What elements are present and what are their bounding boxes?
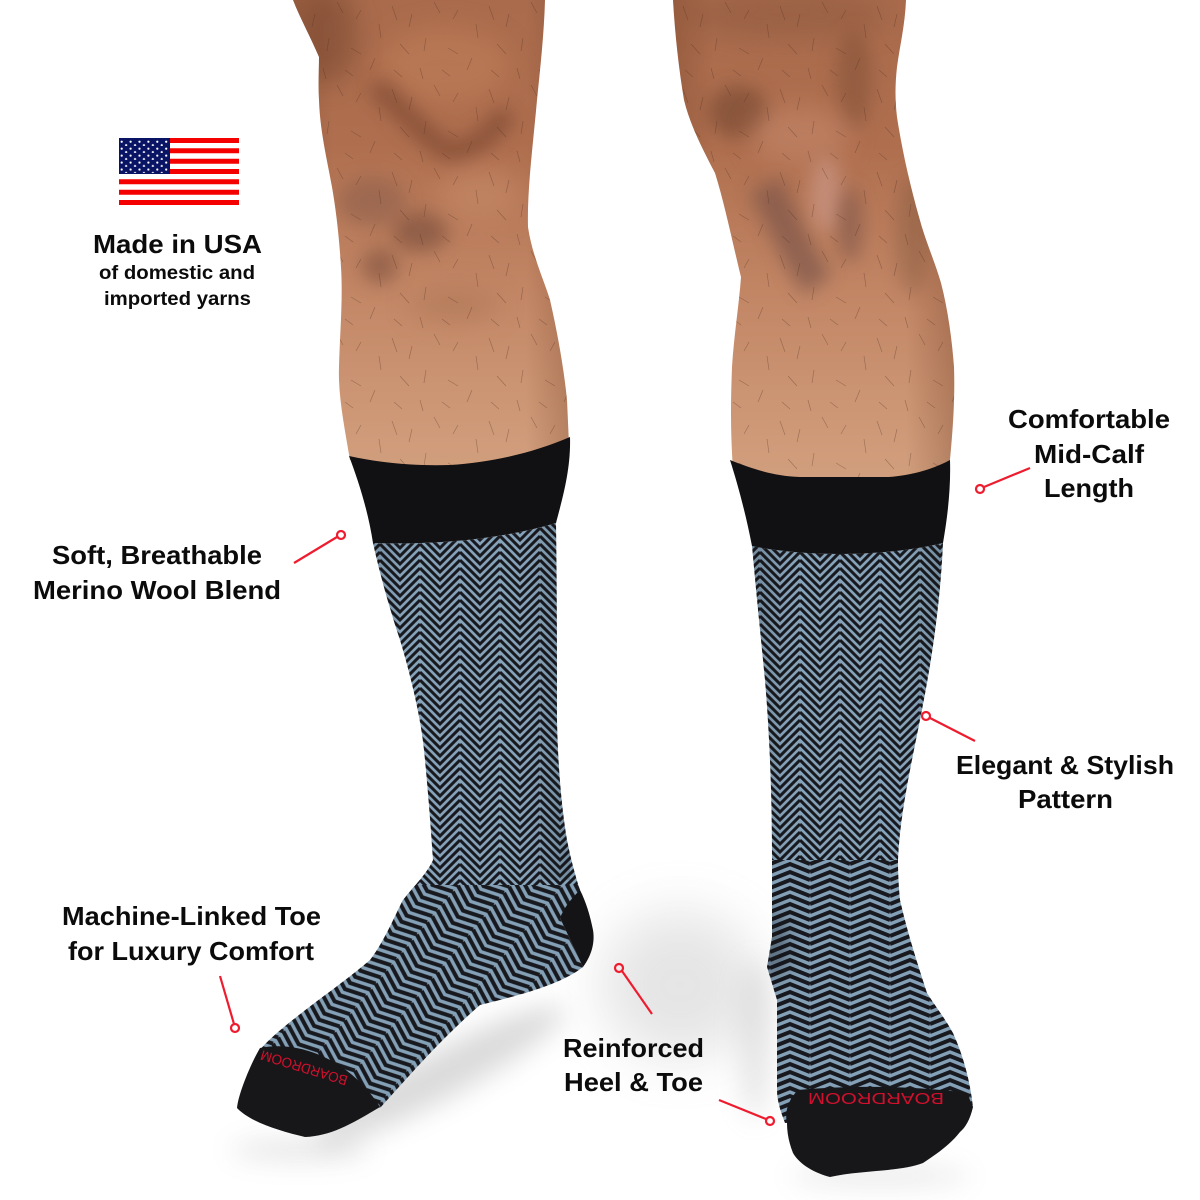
right sock cuff (730, 460, 950, 554)
callout: made in usa: Made in USA (93, 229, 262, 259)
callout: elegant pattern: Elegant & Stylish (956, 750, 1174, 780)
callout: merino wool blend (33, 540, 281, 605)
left sock body (262, 523, 583, 1108)
pointer: elegant pattern (922, 712, 975, 741)
callout: machine-linked toe: for Luxury Comfort (68, 936, 314, 966)
right leg (660, 0, 960, 490)
callout: merino wool blend: Merino Wool Blend (33, 575, 281, 605)
callout: machine-linked toe: Machine-Linked Toe (62, 901, 321, 931)
left sock cuff (349, 437, 570, 543)
pointer: reinforced heel (615, 964, 652, 1014)
right sock toe (786, 1087, 973, 1177)
callout: machine-linked toe (62, 901, 321, 966)
right toe brand: BOARDROOM (808, 1089, 944, 1106)
pointer: reinforced toe (719, 1100, 774, 1125)
pointer: mid-calf length (976, 468, 1030, 493)
callout: elegant pattern (956, 750, 1174, 814)
icon: american flag (119, 138, 239, 205)
callout: reinforced heel and toe (563, 1033, 704, 1097)
callout: mid-calf length: Comfortable (1008, 404, 1170, 434)
left leg (293, 0, 569, 466)
right sock body (752, 543, 973, 1123)
callout: reinforced heel and toe: Heel & Toe (564, 1067, 703, 1097)
callout: elegant pattern: Pattern (1018, 784, 1113, 814)
pointer: merino wool blend (294, 531, 345, 563)
left toe brand: BOARDROOM (259, 1047, 349, 1089)
callout: merino wool blend: Soft, Breathable (52, 540, 262, 570)
left sock heel (560, 890, 594, 967)
left sock (237, 437, 600, 1137)
floor shadows under the feet (230, 910, 970, 1185)
right sock (730, 460, 980, 1177)
callout: mid-calf length: Mid-Calf (1034, 439, 1144, 469)
callout: reinforced heel and toe: Reinforced (563, 1033, 704, 1063)
callout: mid-calf length: Length (1044, 473, 1134, 503)
callout: mid-calf length (1008, 404, 1170, 503)
callout: made in usa (93, 229, 262, 310)
callout: made in usa: of domestic and (99, 263, 255, 284)
pointer: machine-linked toe (220, 976, 239, 1032)
callout: made in usa: imported yarns (104, 289, 251, 310)
left sock toe (237, 1046, 380, 1137)
